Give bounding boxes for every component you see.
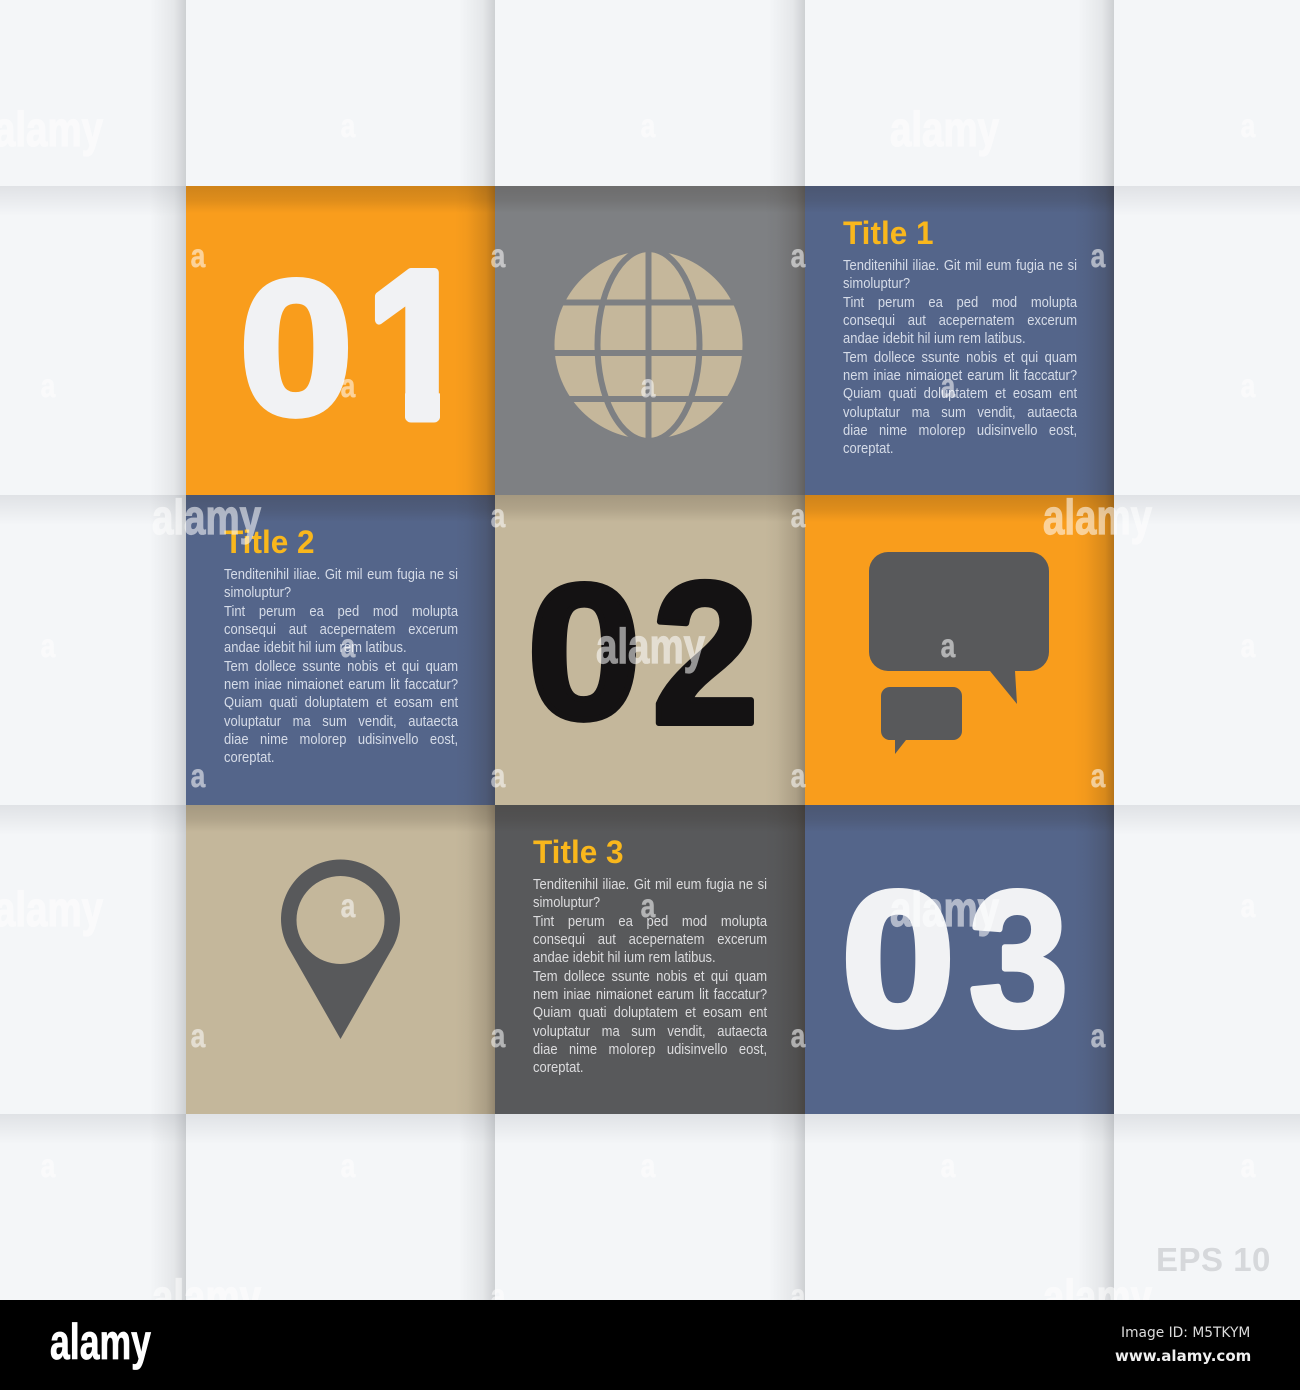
text block: Title 3 body: nem iniae nimaionet earum lit faccatur?	[533, 987, 767, 1003]
icon: location pin	[281, 860, 400, 1039]
watermarks: a	[791, 758, 806, 795]
text block: Title 2 body: voluptatur ma sum vendit, autaecta	[224, 714, 458, 730]
heading: Title 3: Title 3	[533, 834, 624, 870]
panel: title 1	[805, 186, 1114, 495]
watermarks: a	[941, 368, 956, 405]
watermarks: a	[1241, 1148, 1256, 1185]
watermarks: a	[491, 238, 506, 275]
watermarks: a	[191, 758, 206, 795]
image id: Image ID: M5TKYM	[1121, 1325, 1250, 1341]
watermarks: a	[641, 368, 656, 405]
number: 01	[239, 241, 440, 456]
watermarks: alamy	[152, 491, 261, 545]
number: 01: 1	[366, 227, 469, 466]
watermarks: a	[791, 1278, 806, 1315]
watermarks: a	[491, 1018, 506, 1055]
text block: Title 1 body: coreptat.	[843, 441, 894, 457]
panel: globe	[495, 186, 805, 495]
watermarks: a	[1241, 108, 1256, 145]
heading: Title 1: Title 1	[843, 215, 934, 251]
watermarks: a	[641, 1148, 656, 1185]
text block: Title 2 body: diae nime molorep udisinvello eost,	[224, 732, 458, 748]
watermarks: a	[341, 1148, 356, 1185]
watermarks: a	[191, 1018, 206, 1055]
watermarks: a	[791, 238, 806, 275]
text block: Title 2 body: Quiam quati doluptatem et eosam ent	[224, 695, 458, 711]
panel: number 02	[495, 495, 805, 805]
watermarks: a	[491, 498, 506, 535]
text block: Title 3 body	[533, 877, 768, 1076]
text block: Title 1 body: andae idebit hil ium rem latibus.	[843, 331, 1026, 347]
watermarks: a	[491, 1278, 506, 1315]
footer logo: alamy: alamy	[50, 1314, 151, 1370]
watermarks: a	[641, 108, 656, 145]
text block: Title 2 body: nem iniae nimaionet earum lit faccatur?	[224, 677, 458, 693]
panel: number 03	[805, 805, 1114, 1114]
panel: number 01	[186, 186, 495, 495]
text block: Title 1 body: Tenditenihil iliae. Git mil eum fugia ne si	[843, 258, 1077, 274]
text block: Title 2 body: Tint perum ea ped mod molupta	[224, 604, 458, 620]
watermarks: alamy	[890, 883, 999, 937]
text block: Title 3 body: diae nime molorep udisinvello eost,	[533, 1042, 767, 1058]
watermarks: a	[341, 368, 356, 405]
number: 02: 2	[652, 541, 759, 766]
website url: www.alamy.com	[1115, 1347, 1251, 1365]
text block: Title 3 body: andae idebit hil ium rem latibus.	[533, 950, 716, 966]
text block: Title 3 body: Tenditenihil iliae. Git mil eum fugia ne si	[533, 877, 767, 893]
text block: Title 1 body: Quiam quati doluptatem et eosam ent	[843, 386, 1077, 402]
number: 03: 3	[969, 852, 1068, 1066]
number: 02	[527, 541, 759, 766]
watermarks: a	[1241, 628, 1256, 665]
number: 01: 0	[239, 241, 353, 456]
heading: Title 2: Title 2	[224, 524, 315, 560]
text block: Title 2 body: simoluptur?	[224, 585, 291, 601]
text block: Title 3 body: coreptat.	[533, 1060, 584, 1076]
panel: title 3	[495, 805, 805, 1114]
text block: Title 1 body: Tint perum ea ped mod molupta	[843, 295, 1077, 311]
watermarks: a	[41, 368, 56, 405]
watermarks: a	[341, 888, 356, 925]
watermarks: a	[191, 238, 206, 275]
text block: Title 2 body: consequi aut acepernatem excerum	[224, 622, 458, 638]
panel: title 2	[186, 495, 495, 805]
icon: globe	[554, 252, 742, 438]
number: 02: 0	[527, 545, 641, 760]
watermarks: a	[1091, 1018, 1106, 1055]
text block: Title 3 body: simoluptur?	[533, 895, 600, 911]
text block: Title 2 body	[224, 567, 458, 766]
watermarks: alamy	[596, 620, 705, 674]
text block: Title 3 body: consequi aut acepernatem excerum	[533, 932, 767, 948]
icon: speech bubbles	[869, 552, 1049, 754]
watermarks: a	[41, 1148, 56, 1185]
footer bar	[0, 1300, 1300, 1390]
watermarks: a	[791, 498, 806, 535]
panel: speech bubbles	[805, 495, 1114, 805]
text block: Title 3 body: Tint perum ea ped mod molupta	[533, 914, 767, 930]
watermarks: a	[941, 1148, 956, 1185]
watermarks: alamy	[1043, 491, 1152, 545]
watermarks: a	[41, 628, 56, 665]
watermarks: a	[341, 108, 356, 145]
text block: Title 3 body: Quiam quati doluptatem et eosam ent	[533, 1005, 767, 1021]
watermarks: alamy	[152, 1271, 261, 1325]
text block: Title 1 body: Tem dollece ssunte nobis et qui quam	[843, 350, 1077, 366]
watermarks: a	[341, 628, 356, 665]
watermarks: a	[641, 888, 656, 925]
number: 03: 0	[841, 852, 955, 1067]
text block: Title 1 body: consequi aut acepernatem excerum	[843, 313, 1077, 329]
watermarks: a	[1091, 238, 1106, 275]
text block: Title 3 body: voluptatur ma sum vendit, autaecta	[533, 1024, 767, 1040]
text block: Title 1 body: diae nime molorep udisinvello eost,	[843, 423, 1077, 439]
text block: Title 1 body: nem iniae nimaionet earum lit faccatur?	[843, 368, 1077, 384]
label: EPS 10: EPS 10	[1156, 1241, 1271, 1278]
number: 03	[841, 852, 1068, 1067]
panel: location pin	[186, 805, 495, 1114]
watermarks: a	[941, 628, 956, 665]
watermarks: alamy	[1043, 1271, 1152, 1325]
text block: Title 2 body: andae idebit hil ium rem latibus.	[224, 640, 407, 656]
watermarks: a	[491, 758, 506, 795]
text block: Title 3 body: Tem dollece ssunte nobis et qui quam	[533, 969, 767, 985]
text block: Title 1 body: voluptatur ma sum vendit, autaecta	[843, 405, 1077, 421]
watermarks: alamy	[890, 103, 999, 157]
text block: Title 1 body	[843, 258, 1078, 457]
text block: Title 2 body: Tenditenihil iliae. Git mil eum fugia ne si	[224, 567, 458, 583]
text block: Title 2 body: Tem dollece ssunte nobis et qui quam	[224, 659, 458, 675]
watermarks: a	[1091, 758, 1106, 795]
text block: Title 1 body: simoluptur?	[843, 276, 910, 292]
text block: Title 2 body: coreptat.	[224, 750, 275, 766]
watermarks: a	[791, 1018, 806, 1055]
watermarks: a	[1241, 368, 1256, 405]
watermarks: a	[1241, 888, 1256, 925]
